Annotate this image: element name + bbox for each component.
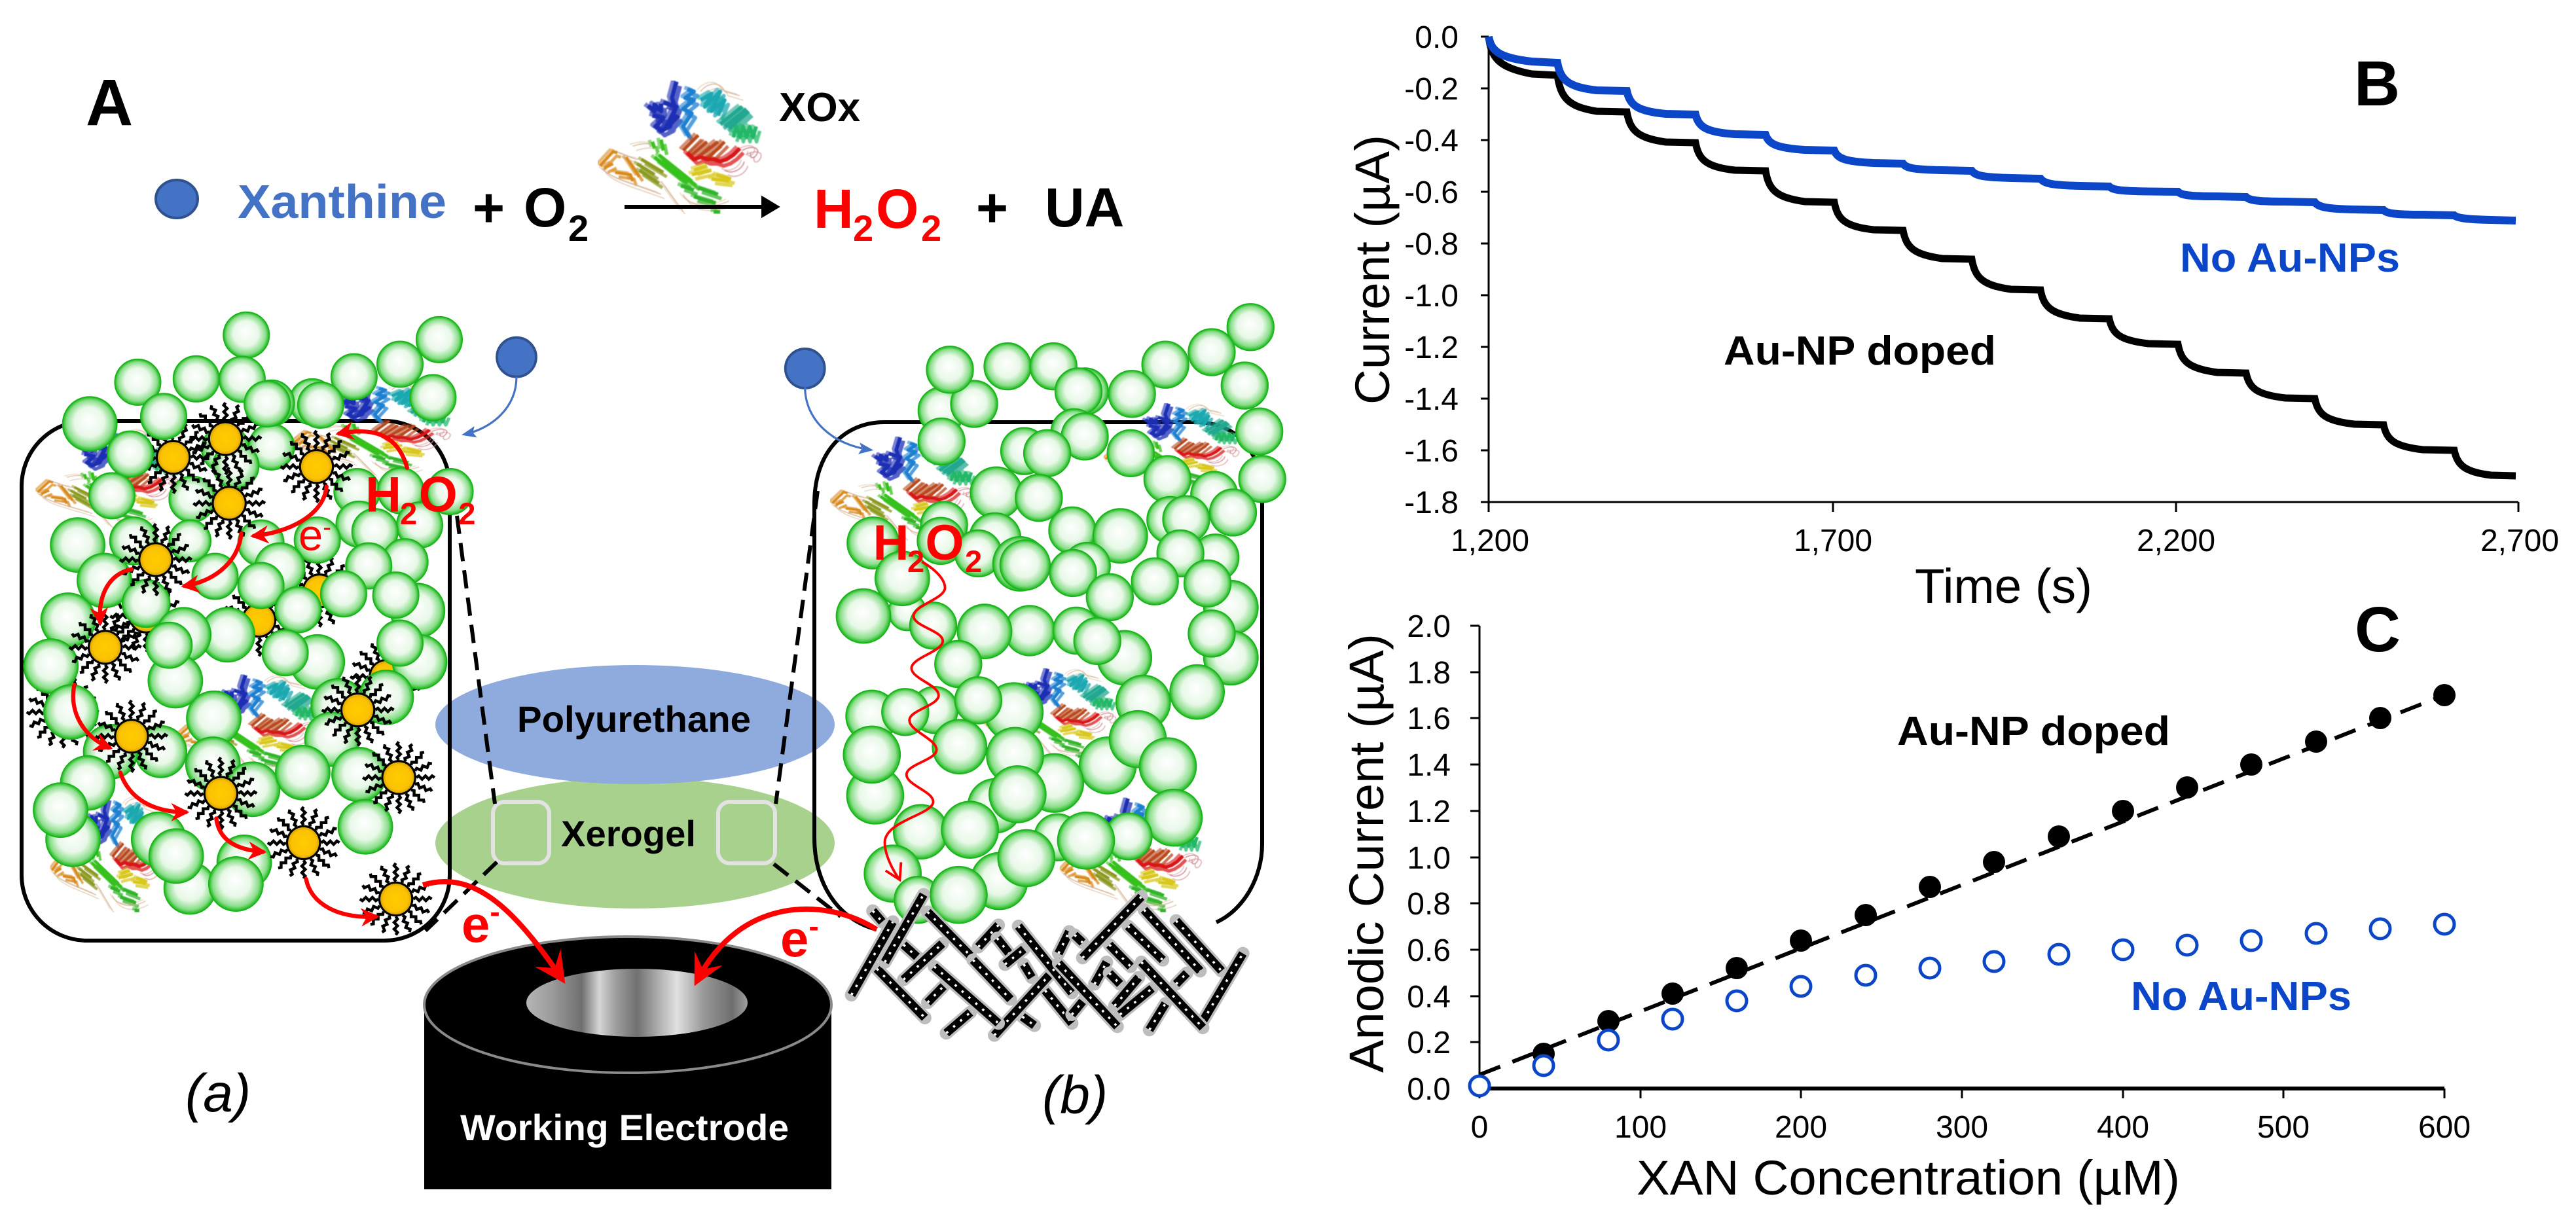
y tick labels: 1.4 bbox=[1407, 748, 1451, 783]
y tick labels: 1.6 bbox=[1407, 702, 1451, 736]
x tick labels: 500 bbox=[2257, 1110, 2310, 1145]
product hydrogen peroxide: 2 bbox=[853, 207, 873, 249]
hydrogen peroxide label: O bbox=[925, 515, 964, 571]
product hydrogen peroxide: 2 bbox=[921, 207, 941, 249]
zoom box right bbox=[718, 802, 775, 863]
enzyme bottom right bbox=[1059, 797, 1201, 914]
panel b: undoped xerogel bbox=[786, 304, 1286, 924]
x tick labels: 200 bbox=[1775, 1110, 1827, 1145]
x tick labels: 300 bbox=[1936, 1110, 1988, 1145]
front xerogel particles bbox=[24, 312, 473, 914]
curve: Au-NP doped bbox=[1489, 37, 2516, 476]
enzyme middle bbox=[984, 668, 1116, 759]
series label: no Au-NPs: No Au-NPs bbox=[2180, 236, 2400, 281]
product hydrogen peroxide: H bbox=[814, 178, 854, 240]
reaction equation bbox=[156, 80, 1124, 249]
x tick labels: 400 bbox=[2097, 1110, 2149, 1145]
y tick labels: 0.2 bbox=[1407, 1026, 1451, 1060]
y tick labels: -1.2 bbox=[1404, 331, 1459, 365]
x tick labels: 1,700 bbox=[1794, 524, 1872, 558]
hydrogen peroxide label: 2 bbox=[458, 497, 476, 531]
enzyme top right bbox=[291, 382, 450, 478]
x tick labels: 2,200 bbox=[2137, 524, 2215, 558]
enzyme bottom left bbox=[50, 795, 169, 914]
electrode metal disk bbox=[526, 969, 748, 1037]
electron label right: e bbox=[780, 910, 808, 967]
plus uric acid: + bbox=[976, 177, 1008, 238]
curve: no Au-NPs bbox=[1489, 37, 2516, 221]
trend line bbox=[1479, 695, 2444, 1075]
y tick labels: -0.8 bbox=[1404, 227, 1459, 262]
x tick labels: 2,700 bbox=[2480, 524, 2559, 558]
panel a: gold nanoparticle doped xerogel bbox=[24, 312, 536, 935]
y tick labels: -1.8 bbox=[1404, 486, 1459, 520]
y tick labels: 0.0 bbox=[1407, 1072, 1451, 1107]
y tick labels: -1.6 bbox=[1404, 434, 1459, 469]
y tick labels: 1.2 bbox=[1407, 795, 1451, 829]
icon: xanthine entering film bbox=[497, 338, 536, 377]
panel b: outline bbox=[814, 422, 1262, 929]
y tick labels: 1.0 bbox=[1407, 841, 1451, 876]
enzyme top left bbox=[829, 436, 976, 543]
xerogel particles bbox=[837, 304, 1286, 924]
membrane layers bbox=[435, 665, 835, 909]
y tick labels bbox=[1407, 609, 1451, 1107]
y tick labels: 0.6 bbox=[1407, 933, 1451, 968]
y tick labels bbox=[1404, 20, 1459, 520]
product hydrogen peroxide: O bbox=[876, 178, 918, 240]
series: Au-NP doped bbox=[1468, 684, 2456, 1097]
x tick labels: 600 bbox=[2418, 1110, 2471, 1145]
series: no Au-NPs bbox=[1470, 914, 2454, 1096]
chart C: calibration curve bbox=[1339, 594, 2471, 1205]
caption b: (b) bbox=[1042, 1066, 1108, 1125]
polyurethane label: Polyurethane bbox=[517, 698, 751, 740]
zoom box left bbox=[493, 802, 549, 863]
plus uric acid: UA bbox=[1045, 177, 1124, 238]
electron label: e bbox=[299, 511, 323, 560]
series label: no Au-NPs: No Au-NPs bbox=[2131, 974, 2351, 1019]
y tick labels: 0.4 bbox=[1407, 980, 1451, 1015]
plus oxygen: + bbox=[473, 177, 505, 238]
series label: Au-NP doped: Au-NP doped bbox=[1897, 709, 2170, 754]
xanthine diffusion arrow bbox=[464, 377, 517, 435]
hydrogen peroxide label: H bbox=[365, 467, 401, 523]
back xerogel particles bbox=[110, 424, 380, 566]
xanthine diffusion arrow bbox=[805, 387, 871, 450]
electrode body bbox=[424, 1005, 831, 1189]
reaction arrow bbox=[625, 199, 776, 215]
electrode label: Working Electrode bbox=[460, 1107, 789, 1148]
y axis title: Current (µA) bbox=[1345, 135, 1400, 405]
panel a: outline bbox=[22, 421, 450, 941]
y tick labels: 1.8 bbox=[1407, 656, 1451, 691]
enzyme label: XOx bbox=[779, 85, 861, 130]
electron label: - bbox=[323, 513, 331, 541]
x tick labels: 1,200 bbox=[1451, 524, 1529, 558]
hydrogen peroxide label: 2 bbox=[907, 545, 924, 579]
xerogel label: Xerogel bbox=[561, 813, 696, 854]
hydrogen peroxide label: 2 bbox=[400, 497, 417, 531]
wavy diffusion arrow bbox=[885, 562, 945, 880]
surface gold nanoparticles bbox=[69, 467, 435, 935]
panel label A: A bbox=[86, 66, 133, 139]
axes and ticks bbox=[1481, 37, 2518, 512]
x axis title: Time (s) bbox=[1915, 559, 2092, 613]
hydrogen peroxide label: 2 bbox=[965, 545, 982, 579]
buried gold nanoparticles bbox=[27, 403, 422, 748]
carbon nanotube mesh bbox=[852, 895, 1243, 1035]
x axis title: XAN Concentration (µM) bbox=[1637, 1151, 2180, 1205]
chart B: current versus time bbox=[1345, 20, 2559, 613]
electron transfer arrow from nanoparticle bbox=[423, 882, 562, 979]
y tick labels: 2.0 bbox=[1407, 609, 1451, 644]
y tick labels: -0.2 bbox=[1404, 72, 1459, 107]
panel label B: B bbox=[2354, 48, 2400, 119]
enzyme top right bbox=[1103, 403, 1239, 492]
y axis title: Anodic Current (µA) bbox=[1339, 634, 1394, 1073]
icon: xanthine entering film bbox=[786, 349, 825, 388]
y tick labels: 0.0 bbox=[1415, 20, 1459, 55]
axes and ticks bbox=[1470, 626, 2444, 1098]
enzyme middle bbox=[175, 674, 321, 774]
plus oxygen: 2 bbox=[568, 207, 589, 249]
polyurethane layer bbox=[435, 665, 835, 784]
xanthine label: Xanthine bbox=[238, 176, 446, 228]
xerogel layer bbox=[435, 778, 835, 909]
plus oxygen: O bbox=[524, 177, 566, 238]
y tick labels: 0.8 bbox=[1407, 887, 1451, 922]
hydrogen peroxide label: H bbox=[873, 515, 909, 571]
zoom dashed guide lines bbox=[426, 491, 841, 931]
y tick labels: -0.6 bbox=[1404, 175, 1459, 210]
y tick labels: -1.0 bbox=[1404, 279, 1459, 314]
caption a: (a) bbox=[185, 1064, 251, 1123]
electrode top face bbox=[424, 937, 831, 1073]
icon: xanthine molecule bbox=[156, 180, 198, 218]
panel label C: C bbox=[2355, 594, 2401, 665]
working electrode bbox=[424, 937, 831, 1189]
electron transfer arrow from nanotubes bbox=[697, 909, 877, 981]
icon: xanthine oxidase enzyme bbox=[597, 80, 761, 216]
y tick labels: -1.4 bbox=[1404, 382, 1459, 417]
x tick labels bbox=[1451, 524, 2559, 558]
electron label left: e bbox=[462, 895, 490, 953]
x tick labels: 100 bbox=[1614, 1110, 1667, 1145]
electron hopping arrows bbox=[73, 431, 407, 917]
enzyme left bbox=[35, 427, 181, 530]
hydrogen peroxide label: O bbox=[419, 467, 458, 523]
y tick labels: -0.4 bbox=[1404, 124, 1459, 158]
x tick labels: 0 bbox=[1471, 1110, 1488, 1145]
electron label left: - bbox=[490, 895, 500, 929]
electron label right: - bbox=[808, 909, 819, 943]
series label: Au-NP doped: Au-NP doped bbox=[1724, 329, 1996, 374]
x tick labels bbox=[1471, 1110, 2471, 1145]
x axis line bbox=[1479, 1087, 2444, 1090]
